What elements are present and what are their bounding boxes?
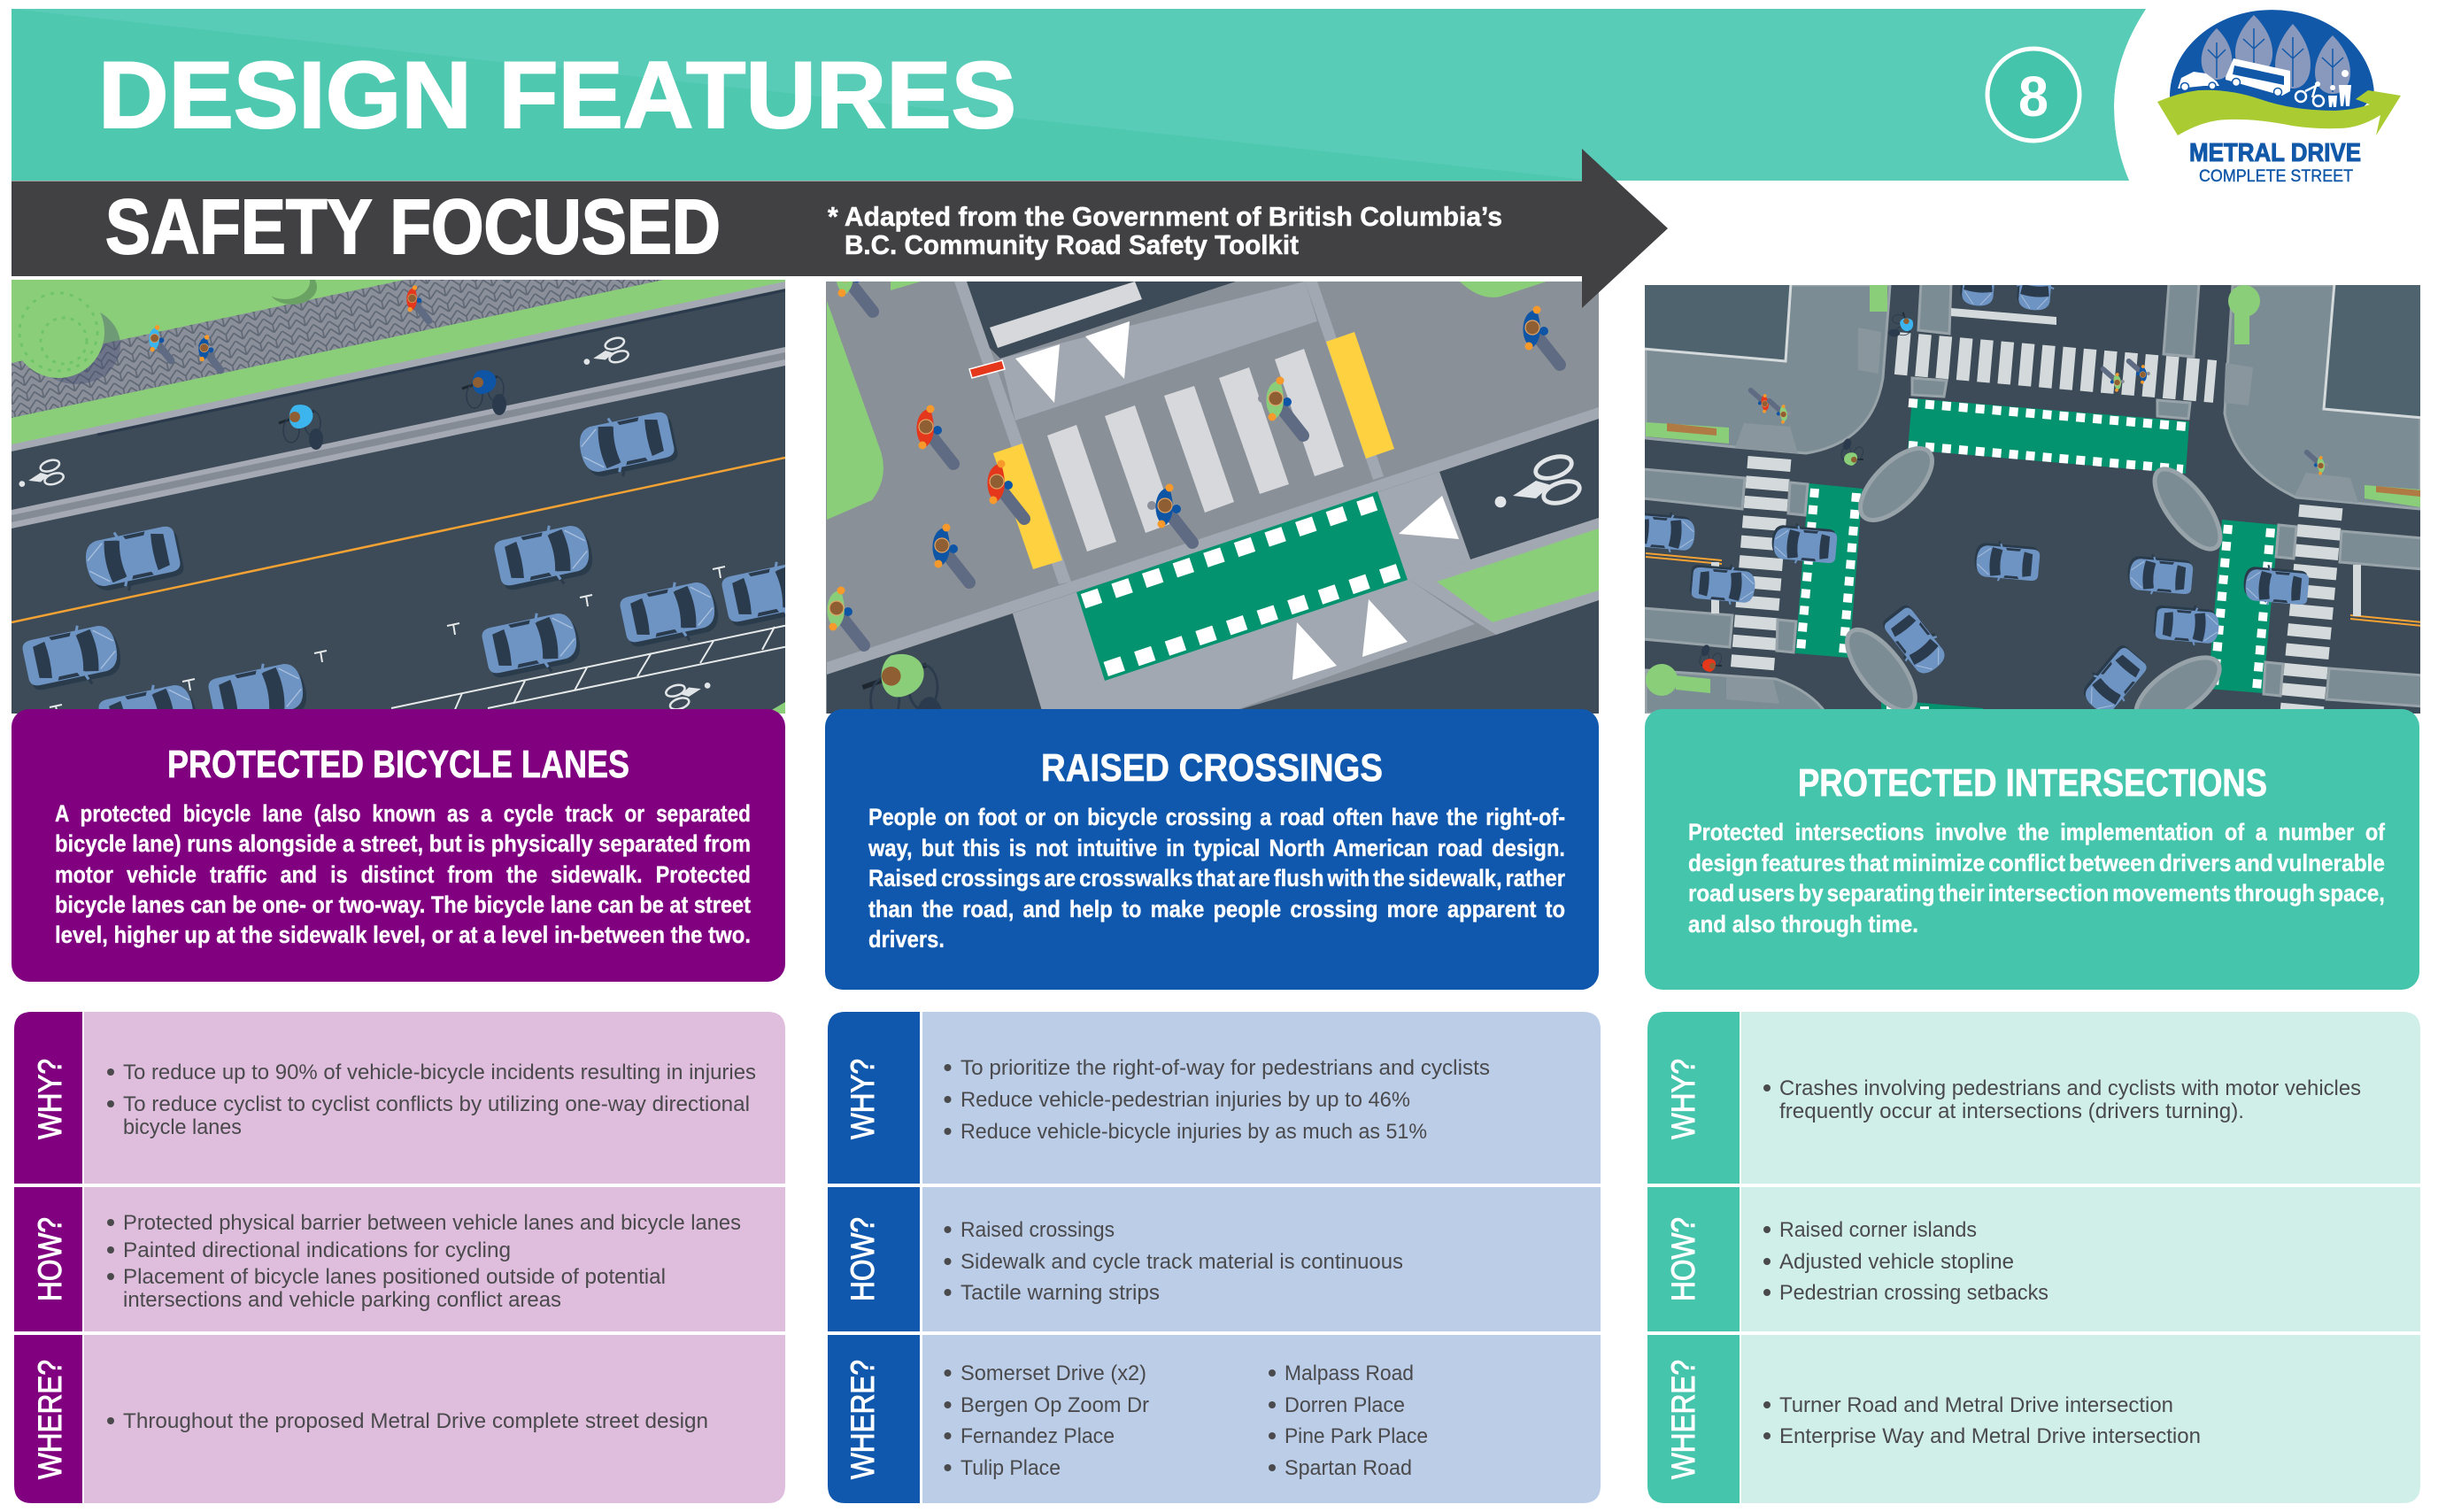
heading: PROTECTED BICYCLE LANES <box>167 743 629 786</box>
crossing surface <box>1015 321 1373 582</box>
where list: Fernandez Place <box>961 1424 1115 1448</box>
west crosswalk <box>1752 458 1770 673</box>
cars <box>23 413 785 709</box>
logo: Metral Drive Complete Street: METRAL DRIVE <box>2189 139 2361 167</box>
zebra stripes <box>1047 349 1344 552</box>
yield triangles top <box>1015 321 1130 403</box>
curb band <box>827 407 1599 675</box>
how list: Adjusted vehicle stopline <box>1779 1250 2014 1274</box>
cyclists <box>279 370 506 450</box>
bicycle symbol <box>1495 452 1582 507</box>
table: raised crossings <box>828 1012 1601 1503</box>
street tree small <box>271 280 317 305</box>
row labels <box>32 1059 68 1479</box>
trees <box>1646 285 2260 696</box>
where list: Bergen Op Zoom Dr <box>961 1393 1149 1417</box>
how list: Raised corner islands <box>1779 1218 1977 1242</box>
source note <box>828 201 1502 260</box>
how list: Tactile warning strips <box>961 1281 1160 1305</box>
where list <box>944 1362 1428 1480</box>
why list <box>944 1056 1490 1144</box>
how list: intersections and vehicle parking conflict areas <box>123 1288 561 1312</box>
north stop bar <box>1951 308 2056 325</box>
corner sidewalks <box>1646 285 2420 714</box>
east crosswalk <box>2302 506 2321 714</box>
row labels: HOW? <box>845 1217 881 1301</box>
description <box>1688 819 2386 937</box>
how list: Painted directional indications for cycling <box>123 1238 511 1262</box>
parking T marks <box>50 567 725 716</box>
north median blocks <box>1912 283 2199 419</box>
dark arrow banner <box>12 149 1668 308</box>
description: Raised crossings are crosswalks that are flush with the sidewalk, rather <box>868 865 1565 891</box>
side medians <box>1643 469 2423 706</box>
where list <box>1763 1393 2201 1448</box>
why list <box>1763 1076 2361 1123</box>
number badge <box>1987 49 2079 141</box>
description: A protected bicycle lane (also known as a cycle track or separated <box>55 800 751 827</box>
how list <box>944 1218 1403 1305</box>
ramp <box>1000 282 1317 420</box>
heading: PROTECTED INTERSECTIONS <box>1798 761 2267 805</box>
logo: Metral Drive Complete Street: COMPLETE STREET <box>2199 167 2353 186</box>
why list: Crashes involving pedestrians and cyclists with motor vehicles <box>1779 1076 2361 1100</box>
pedestrians <box>819 253 1560 645</box>
top road <box>967 282 1236 359</box>
why list: To reduce cyclist to cyclist conflicts by utilizing one-way directional <box>123 1092 750 1116</box>
parking bay lines <box>391 626 785 714</box>
where list: Malpass Road <box>1285 1362 1414 1385</box>
description: than the road, and help to make people crossing more apparent to <box>868 896 1565 922</box>
street tree large <box>18 292 104 378</box>
row labels: HOW? <box>1665 1217 1701 1301</box>
row labels: WHY? <box>845 1059 881 1139</box>
where list: Tulip Place <box>961 1456 1061 1480</box>
where list: Somerset Drive (x2) <box>961 1362 1146 1385</box>
how list: Placement of bicycle lanes positioned outside of potential <box>123 1265 666 1289</box>
orange centre line <box>12 458 785 622</box>
why list <box>107 1061 756 1139</box>
centre lines <box>1646 553 2423 626</box>
row labels: WHERE? <box>32 1360 68 1479</box>
image: protected intersection scene <box>1631 242 2423 736</box>
why list: To reduce up to 90% of vehicle-bicycle incidents resulting in injuries <box>123 1061 756 1084</box>
corner islands <box>1835 436 2232 736</box>
cyclists <box>1695 312 1913 675</box>
row labels: WHY? <box>32 1059 68 1139</box>
source note: B.C. Community Road Safety Toolkit <box>845 229 1299 260</box>
panel: raised crossings <box>825 709 1599 990</box>
description: bicycle lane) runs alongside a street, but is physically separated from <box>55 830 751 857</box>
number badge: 8 <box>2018 65 2048 128</box>
east green crossing <box>2208 520 2279 693</box>
south green crossing <box>1881 699 1983 714</box>
image: raised crossing scene <box>826 282 1599 714</box>
how list <box>107 1211 741 1312</box>
where list: Turner Road and Metral Drive intersection <box>1779 1393 2173 1417</box>
how list <box>1763 1218 2048 1305</box>
where list: Spartan Road <box>1285 1456 1412 1480</box>
section heading: safety focused: SAFETY FOCUSED <box>105 184 721 270</box>
description: People on foot or on bicycle crossing a road often have the right-of- <box>868 804 1565 830</box>
pedestrians on pavers <box>144 285 428 370</box>
planted buffer <box>1409 518 1599 635</box>
table: protected intersections <box>1647 1012 2420 1503</box>
description: drivers. <box>868 926 945 953</box>
where list: Dorren Place <box>1285 1393 1405 1417</box>
row labels: HOW? <box>32 1217 68 1301</box>
north crosswalk <box>1896 353 2215 382</box>
side strips <box>954 282 1384 584</box>
description: and also through time. <box>1688 911 1918 937</box>
header band <box>12 9 2146 181</box>
description: design features that minimize conflict between drivers and vulnerable <box>1688 850 2385 876</box>
green verges top and left <box>827 282 1547 520</box>
heading: RAISED CROSSINGS <box>1041 746 1383 790</box>
north green crossing <box>1908 398 2189 474</box>
panel: protected intersections <box>1645 709 2419 990</box>
why list: To prioritize the right-of-way for pedestrians and cyclists <box>961 1056 1490 1080</box>
row labels: WHERE? <box>1665 1360 1701 1479</box>
why list: frequently occur at intersections (drivers turning). <box>1779 1099 2244 1123</box>
table: protected bicycle lanes <box>14 1012 785 1503</box>
description: way, but this is not intuitive in typical North American road design. <box>868 835 1565 861</box>
where list: Pine Park Place <box>1285 1424 1428 1448</box>
tree shadow <box>51 312 120 384</box>
logo: Metral Drive Complete Street <box>2157 10 2401 186</box>
panel: protected bicycle lanes <box>12 709 785 982</box>
how list: Sidewalk and cycle track material is continuous <box>961 1250 1403 1274</box>
cars <box>1631 242 2310 720</box>
source note: * Adapted from the Government of British Columbia’s <box>828 201 1502 232</box>
stop bar <box>990 282 1142 348</box>
ramps <box>1726 328 2358 704</box>
row labels: WHY? <box>1665 1059 1701 1139</box>
yield triangles lower <box>1292 496 1459 680</box>
tactile warning strips <box>993 332 1394 569</box>
bicycle lane symbols <box>19 336 711 712</box>
description: bicycle lanes can be one- or two-way. The bicycle lane can be at street <box>55 891 751 918</box>
green bicycle crossing <box>1076 491 1408 681</box>
roadway <box>12 289 785 714</box>
pedestrians <box>1751 358 2330 476</box>
why list: Reduce vehicle-pedestrian injuries by up to 46% <box>961 1088 1410 1112</box>
red bollard <box>969 360 1005 378</box>
how list: Raised crossings <box>961 1218 1115 1242</box>
description: motor vehicle traffic and is distinct from the sidewalk. Protected <box>55 861 751 888</box>
row labels: WHERE? <box>845 1360 881 1479</box>
roads lower <box>827 419 1599 714</box>
why list: bicycle lanes <box>123 1115 242 1139</box>
how list: Pedestrian crossing setbacks <box>1779 1281 2048 1305</box>
paver sidewalk <box>12 280 664 418</box>
where list: Enterprise Way and Metral Drive intersection <box>1779 1424 2201 1448</box>
image: protected bicycle lane street scene <box>12 264 821 751</box>
cyclist <box>862 654 942 735</box>
curb <box>12 282 785 451</box>
corner lots <box>1643 283 2423 418</box>
planted strips and benches <box>1646 285 2420 693</box>
description <box>55 800 751 948</box>
row labels <box>1665 1059 1701 1479</box>
raised cycle ramp <box>1013 472 1475 714</box>
where list: Throughout the proposed Metral Drive complete street design <box>123 1409 708 1433</box>
west green crossing <box>1795 483 1863 658</box>
how list: Protected physical barrier between vehicle lanes and bicycle lanes <box>123 1211 741 1235</box>
description: level, higher up at the sidewalk level, or at a level in-between the two. <box>55 922 751 948</box>
title: DESIGN FEATURES <box>98 42 1016 148</box>
concrete median <box>12 347 785 528</box>
why list: Reduce vehicle-bicycle injuries by as much as 51% <box>961 1120 1427 1144</box>
description <box>868 804 1565 953</box>
row labels <box>845 1059 881 1479</box>
